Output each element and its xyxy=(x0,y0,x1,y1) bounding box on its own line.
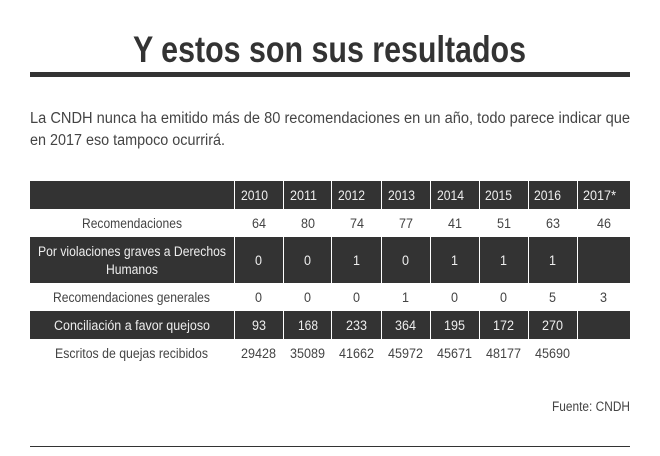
row: Conciliación a favor quejoso: 270 xyxy=(542,318,563,333)
row: Recomendaciones: 51 xyxy=(497,216,511,231)
header row: 2010 xyxy=(241,188,268,203)
row: Conciliación a favor quejoso xyxy=(30,311,630,339)
row: Recomendaciones generales: 1 xyxy=(402,290,409,305)
row: Recomendaciones xyxy=(82,216,611,231)
row: Recomendaciones generales: Recomendaciones generales xyxy=(53,290,210,305)
row: Escritos de quejas recibidos: 35089 xyxy=(290,346,325,361)
header row: 2012 xyxy=(338,188,365,203)
row: Conciliación a favor quejoso: 93 xyxy=(252,318,266,333)
row: Recomendaciones generales: 0 xyxy=(255,290,262,305)
row: Escritos de quejas recibidos: 45671 xyxy=(437,346,472,361)
row: Escritos de quejas recibidos xyxy=(55,346,570,361)
row: Por violaciones graves xyxy=(30,237,630,283)
header row: 2015 xyxy=(485,188,512,203)
source note: Fuente: CNDH xyxy=(552,399,630,414)
title rule xyxy=(30,72,630,77)
row: Recomendaciones: 80 xyxy=(301,216,315,231)
row: Por violaciones graves: 0 xyxy=(402,253,409,268)
row: Escritos de quejas recibidos: 45972 xyxy=(388,346,423,361)
header row: 2016 xyxy=(534,188,561,203)
row: Recomendaciones generales: 0 xyxy=(500,290,507,305)
row: Conciliación a favor quejoso: 364 xyxy=(395,318,416,333)
row: Recomendaciones generales: 0 xyxy=(451,290,458,305)
row: Conciliación a favor quejoso: 172 xyxy=(493,318,514,333)
intro paragraph: en 2017 eso tampoco ocurrirá. xyxy=(30,132,225,149)
intro paragraph xyxy=(30,110,630,149)
row: Recomendaciones: 64 xyxy=(252,216,266,231)
bottom rule xyxy=(30,446,630,447)
row: Recomendaciones: 63 xyxy=(546,216,560,231)
row: Recomendaciones generales: 3 xyxy=(600,290,607,305)
row: Por violaciones graves: 1 xyxy=(353,253,360,268)
row: Por violaciones graves: 0 xyxy=(255,253,262,268)
data table xyxy=(30,181,630,361)
row: Recomendaciones: 41 xyxy=(448,216,462,231)
row: Escritos de quejas recibidos: 45690 xyxy=(535,346,570,361)
row: Escritos de quejas recibidos: 48177 xyxy=(486,346,521,361)
title: Y estos son sus resultados xyxy=(133,29,526,70)
header row xyxy=(30,181,630,209)
row: Escritos de quejas recibidos: Escritos de quejas recibidos xyxy=(55,346,208,361)
row: Conciliación a favor quejoso: 195 xyxy=(444,318,465,333)
intro paragraph: La CNDH nunca ha emitido más de 80 recomendaciones en un año, todo parece indicar que xyxy=(30,110,630,127)
row: Por violaciones graves: 1 xyxy=(500,253,507,268)
row: Recomendaciones: 74 xyxy=(350,216,364,231)
header row: 2017* xyxy=(583,188,617,203)
row: Conciliación a favor quejoso: 168 xyxy=(298,318,318,333)
row: Escritos de quejas recibidos: 41662 xyxy=(339,346,374,361)
row: Por violaciones graves: 1 xyxy=(451,253,458,268)
row: Por violaciones graves: Por violaciones graves a Derechos xyxy=(38,244,226,259)
row: Por violaciones graves: 0 xyxy=(304,253,311,268)
row: Recomendaciones generales: 0 xyxy=(304,290,311,305)
header row: 2014 xyxy=(437,188,464,203)
row: Conciliación a favor quejoso: 233 xyxy=(346,318,367,333)
header row: 2013 xyxy=(388,188,415,203)
row: Recomendaciones: 77 xyxy=(399,216,413,231)
row: Por violaciones graves: Humanos xyxy=(106,262,158,277)
row: Escritos de quejas recibidos: 29428 xyxy=(241,346,276,361)
header row: 2011 xyxy=(290,188,317,203)
row: Por violaciones graves: 1 xyxy=(549,253,556,268)
row: Recomendaciones: Recomendaciones xyxy=(82,216,182,231)
row: Recomendaciones generales: 0 xyxy=(353,290,360,305)
row: Recomendaciones: 46 xyxy=(597,216,611,231)
row: Recomendaciones generales xyxy=(53,290,607,305)
row: Recomendaciones generales: 5 xyxy=(549,290,556,305)
row: Conciliación a favor quejoso: Conciliación a favor quejoso xyxy=(54,318,210,333)
